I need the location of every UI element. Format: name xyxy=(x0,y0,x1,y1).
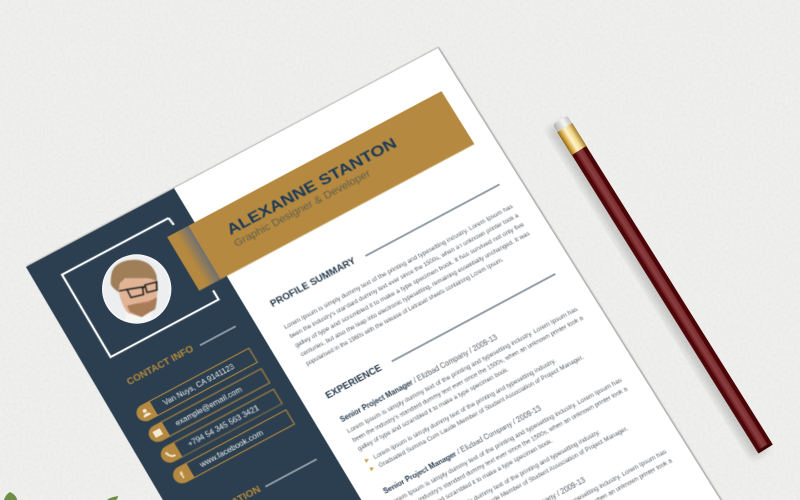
experience entry 1: Graduated Summa Cum Laude Member of Student Association of Project Manager, xyxy=(371,348,576,461)
experience entry 2: Senior Project Manager / Elizbad Company / 2009-13 xyxy=(374,397,534,486)
heading: education xyxy=(204,454,319,500)
heading: contact info xyxy=(125,321,238,388)
section: profile summary: popularised in the 1960s with the release of Letraset sheets containing Lorem Ipsum. xyxy=(302,254,501,363)
section: profile summary xyxy=(268,179,538,367)
contact row: website: www.facebook.com xyxy=(194,423,261,463)
contact row: website xyxy=(170,409,295,487)
glasses xyxy=(119,282,157,298)
contact row: phone xyxy=(158,389,282,466)
experience entry 1: Lorem Ipsum is simply dummy text of the printing and typesetting industry. Lorem Ipsum has xyxy=(341,302,572,428)
experience entry 1: been the industry's standard dummy text ever since the 1500s, when an unknown printer took a xyxy=(346,310,577,437)
shirt xyxy=(126,311,152,322)
section: profile summary: been the industry's standard dummy text ever since the 1500s, when an unknown printer took a xyxy=(286,211,517,337)
heading: contact info: CONTACT INFO xyxy=(124,341,194,385)
pencil body xyxy=(572,146,773,454)
panel: navy sidebar xyxy=(26,188,508,500)
contact row: address: Van Nuys, CA 9141123 xyxy=(160,359,234,403)
leaves: plant tips at bottom left xyxy=(4,492,118,500)
section: experience heading xyxy=(324,270,558,401)
experience entry 1 xyxy=(338,293,604,474)
hair xyxy=(111,260,157,292)
contact row: website: f xyxy=(176,463,185,474)
pencil xyxy=(546,115,774,459)
photo frame xyxy=(62,218,219,357)
section: profile summary: centuries, but also the leap into electronic typesetting, remaining essentially unchanged. It was xyxy=(296,229,527,355)
beard xyxy=(127,297,157,317)
profile photo xyxy=(102,254,171,325)
section: profile summary: Lorem Ipsum is simply dummy text of the printing and typesetting industry. Lorem Ipsum has xyxy=(280,202,511,328)
contact row: phone: +794 54 345 563 3421 xyxy=(184,399,257,443)
contact row: address xyxy=(133,348,258,424)
experience entry 1: galley of type and scrambled it to make a type specimen book. xyxy=(351,361,503,445)
name: ALEXANNE STANTON xyxy=(224,135,400,238)
section: experience heading: EXPERIENCE xyxy=(320,358,379,396)
experience entry 1: Lorem Ipsum is simply dummy text of the printing and typesetting industry. xyxy=(366,352,549,453)
ferrule xyxy=(557,123,587,155)
eraser xyxy=(553,115,574,135)
contact row: email xyxy=(145,368,270,445)
face xyxy=(118,278,158,317)
section: profile summary: PROFILE SUMMARY xyxy=(267,254,356,307)
job title: Graphic Designer & Developer xyxy=(231,167,373,249)
section: profile summary: galley of type and scrambled it to make a type specimen book. It has survived not only five xyxy=(291,220,522,346)
name banner xyxy=(167,91,474,291)
contact row: email: example@email.com xyxy=(172,381,241,423)
experience entry 1: Senior Project Manager / Elizbad Company / 2009-13 xyxy=(334,328,493,418)
